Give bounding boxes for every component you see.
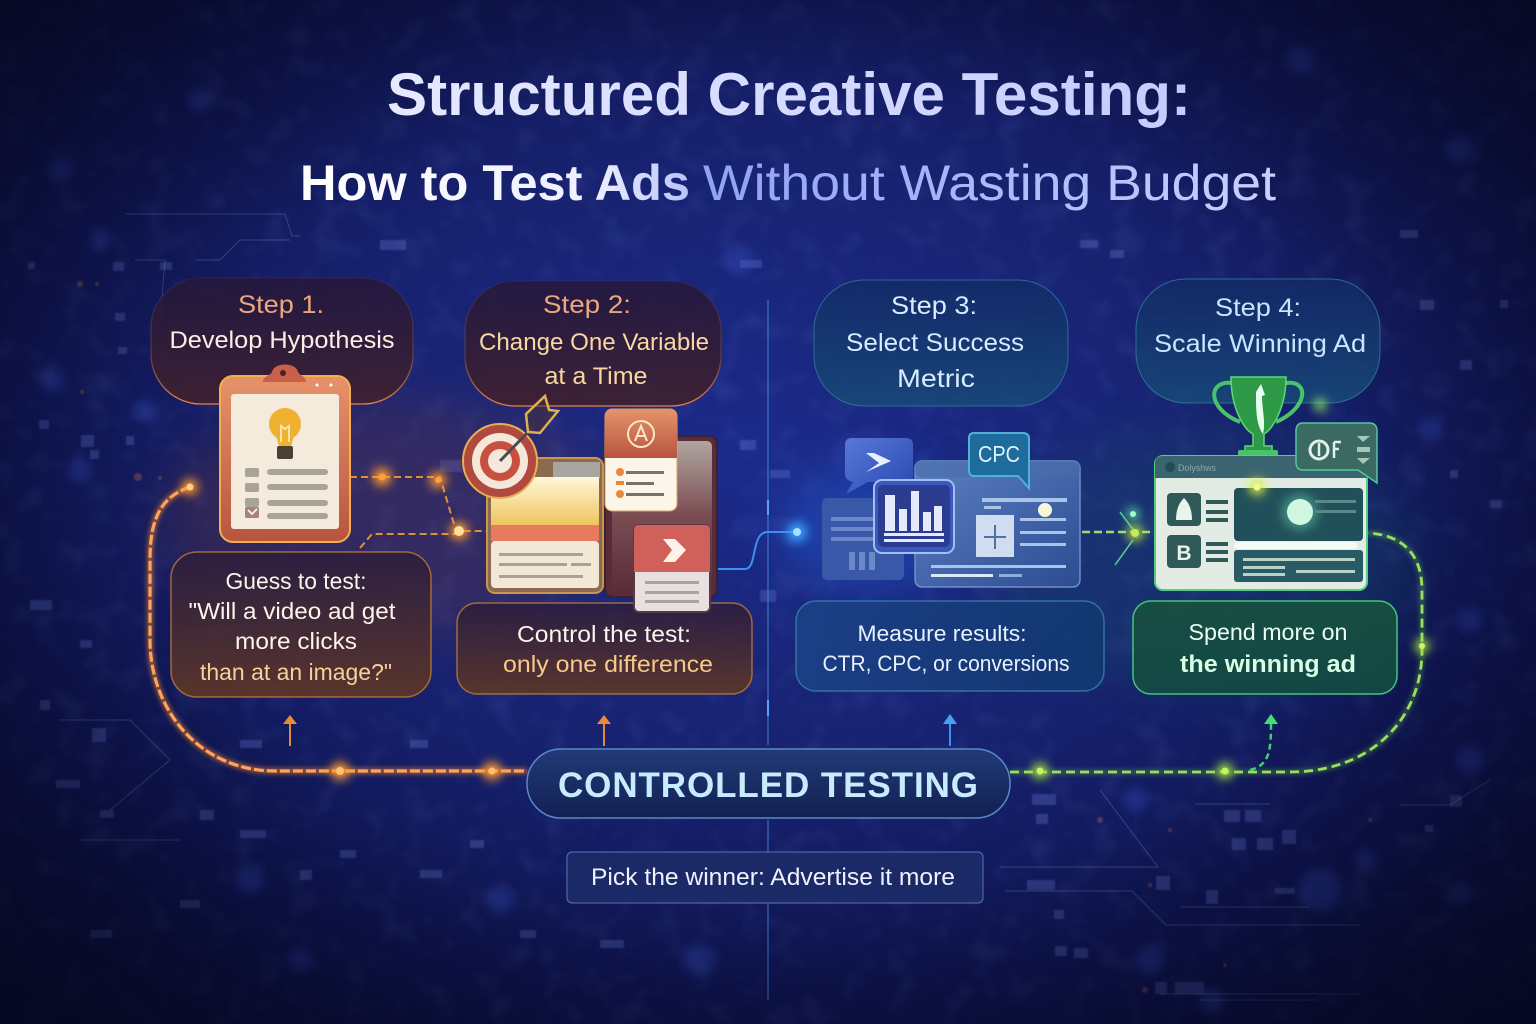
icon: metric dashboards: CPC — [978, 441, 1020, 467]
panel: step 2 description — [457, 603, 752, 694]
icon: winning ad browser: Dolyshws — [1178, 463, 1216, 473]
icon: metric dashboards — [822, 433, 1080, 587]
connector: blue line to step 3 — [715, 500, 1155, 716]
banner: controlled testing — [527, 749, 1010, 818]
panel: step 2 heading: Step 2: — [543, 291, 631, 319]
connector: green dashed loop — [1010, 533, 1429, 779]
panel: step 2 heading: at a Time — [544, 363, 648, 390]
panel: step 2 heading: Change One Variable — [479, 329, 709, 356]
panel: step 3 heading: Metric — [897, 365, 975, 393]
panel: step 4 heading: Scale Winning Ad — [1154, 330, 1366, 358]
callout: pick the winner — [567, 852, 983, 903]
subtitle — [300, 155, 1276, 211]
panel: step 4 heading: Step 4: — [1215, 294, 1301, 322]
panel: step 2 description: only one difference — [503, 651, 713, 677]
callout: pick the winner: Pick the winner: Advertise it more — [591, 864, 955, 891]
panel: step 3 heading: Step 3: — [891, 292, 977, 320]
panel: step 1 description: than at an image?" — [200, 659, 392, 685]
panel: step 1 description: "Will a video ad get — [188, 598, 396, 624]
panel: step 4 heading — [1136, 279, 1380, 403]
panel: step 4 description: the winning ad — [1180, 651, 1356, 678]
panel: step 3 description — [796, 601, 1104, 691]
icon: clipboard with lightbulb — [220, 364, 350, 542]
panel: step 2 heading — [465, 281, 721, 406]
panel: step 1 description: more clicks — [235, 628, 357, 654]
panel: step 1 heading: Step 1. — [238, 291, 324, 319]
banner: controlled testing: CONTROLLED TESTING — [558, 766, 978, 805]
connector: orange dashed loop — [150, 468, 527, 780]
panel: step 3 description: CTR, CPC, or conversions — [822, 651, 1070, 676]
icon: winning ad browser — [1155, 399, 1377, 590]
panel: step 3 heading: Select Success — [846, 329, 1024, 357]
panel: step 3 description: Measure results: — [858, 621, 1026, 646]
arrows up to description boxes — [283, 714, 1278, 746]
panel: step 3 heading — [814, 280, 1068, 406]
icon: target with arrow — [463, 396, 558, 498]
panel: step 1 description — [171, 552, 431, 697]
panel: step 1 heading — [151, 278, 413, 404]
panel: step 4 description: Spend more on — [1188, 619, 1348, 645]
icon: ad layouts — [487, 409, 717, 612]
panel: step 1 heading: Develop Hypothesis — [170, 327, 394, 354]
icon: winning ad browser: B — [1176, 542, 1192, 565]
subtitle: Without Wasting Budget — [703, 155, 1276, 211]
panel: step 2 description: Control the test: — [517, 621, 691, 647]
subtitle: How to Test Ads — [300, 155, 690, 211]
icon: trophy — [1214, 377, 1302, 456]
panel: step 4 description — [1133, 601, 1397, 694]
panel: step 1 description: Guess to test: — [226, 568, 366, 594]
title: Structured Creative Testing: — [387, 61, 1191, 128]
